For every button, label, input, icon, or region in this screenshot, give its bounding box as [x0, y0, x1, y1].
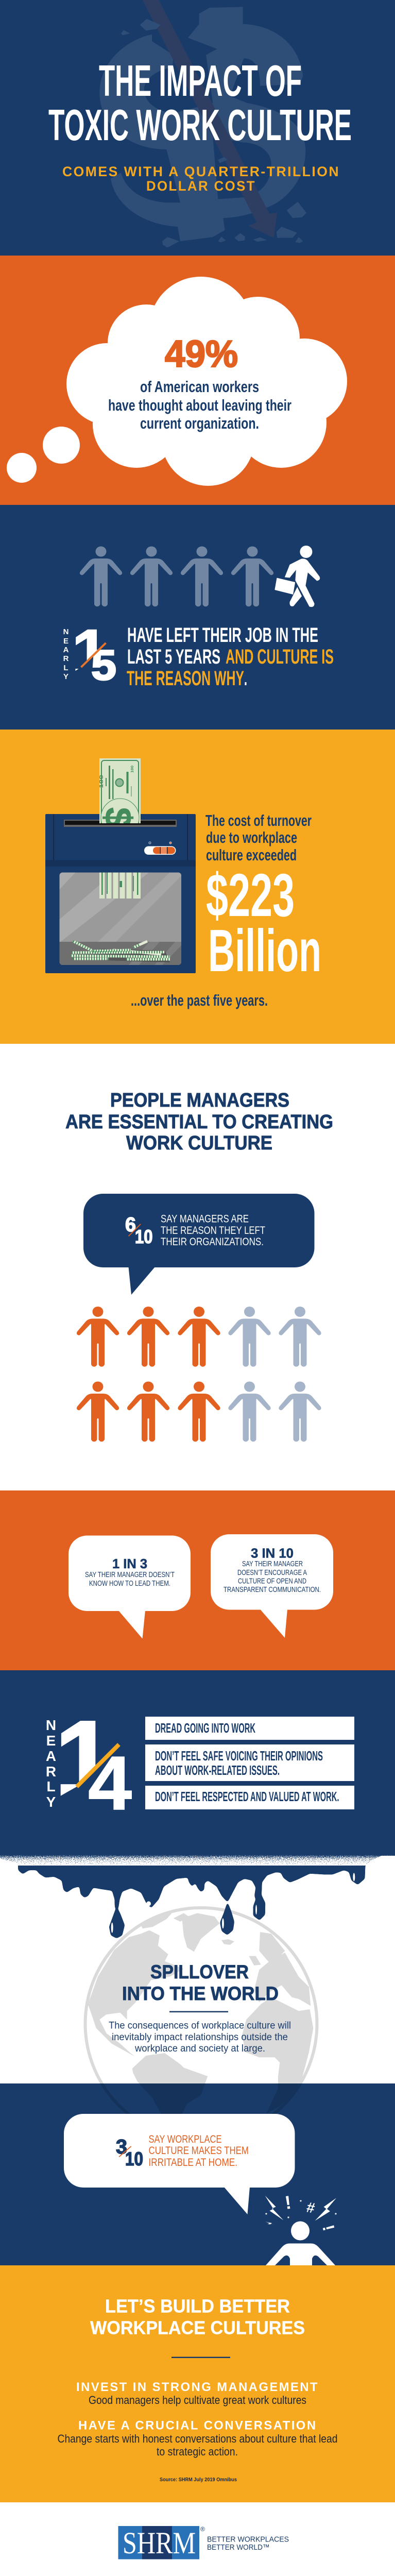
label: nearly vertical: NEARLY	[63, 628, 69, 681]
text: American workers: of American workers	[140, 378, 259, 396]
callout: 3 in 10: 3 IN 10	[251, 1546, 294, 1561]
subtitle: DOLLAR COST	[146, 178, 256, 194]
pictogram: six of ten people highlighted	[77, 1307, 321, 1442]
icon: irritated person: *	[265, 2212, 267, 2218]
callout: 3 in 10	[211, 1534, 333, 1638]
recommendation: have a crucial conversation	[58, 2418, 338, 2458]
icon: irritated person: *	[287, 2216, 289, 2222]
fraction: three tenths: 10	[125, 2148, 143, 2170]
fraction: one quarter	[61, 1721, 132, 1810]
shredded bill strips	[99, 872, 141, 899]
icon row: four standing people	[80, 546, 273, 606]
fraction: one fifth: 1	[72, 615, 109, 690]
callout text: THE REASON THEY LEFT	[161, 1225, 265, 1236]
icon: person walking away with briefcase	[275, 546, 320, 607]
footer: SHRM logo: BETTER WORKPLACES	[207, 2535, 289, 2544]
shredded money pile	[71, 941, 170, 962]
recommendation: have a crucial conversation: HAVE A CRUCIAL CONVERSATION	[78, 2418, 317, 2433]
callout: 3 in 10: SAY THEIR MANAGER	[242, 1560, 303, 1568]
panel: 49 percent thought cloud	[0, 256, 395, 505]
panel: nearly 1 in 5	[0, 505, 395, 730]
icon: thought cloud	[7, 277, 347, 486]
subtitle	[62, 164, 340, 194]
statistic: $223 Billion: Billion	[208, 917, 321, 984]
fraction: three tenths: 3	[116, 2136, 127, 2158]
icon: irritated person: !	[283, 2192, 293, 2213]
panel: people managers	[0, 1044, 395, 1490]
callout text: SAY MANAGERS ARE	[161, 1213, 249, 1225]
statistic: 49%: 49%	[165, 333, 238, 375]
callout: 3 in 10: DOESN’T ENCOURAGE A	[237, 1569, 307, 1577]
text: left their job: .	[244, 667, 247, 690]
panel: irritable at home	[0, 2083, 395, 2265]
body text: The consequences of workplace culture will	[109, 2020, 291, 2031]
list: workplace feelings	[145, 1717, 354, 1809]
body text: inevitably impact relationships outside the	[112, 2031, 288, 2043]
fraction: six tenths: 10	[135, 1226, 152, 1247]
icon: irritated person: !	[319, 2223, 338, 2233]
switch	[144, 842, 176, 855]
panel: build better workplace cultures	[0, 2265, 395, 2502]
panel: manager statistics	[0, 1490, 395, 1670]
icon: irritated person: *	[300, 2199, 302, 2205]
text: cost of turnover	[205, 811, 312, 864]
text: American workers: current organization.	[140, 414, 259, 432]
fraction: one quarter: 4	[88, 1741, 132, 1826]
background icon: cracked dollar sign with falling arrow	[99, 0, 306, 248]
heading: WORK CULTURE	[126, 1132, 272, 1154]
callout: 1 in 3	[68, 1535, 191, 1638]
callout text: THEIR ORGANIZATIONS.	[161, 1236, 264, 1248]
heading: WORKPLACE CULTURES	[90, 2317, 305, 2338]
callout: 1 in 3: SAY THEIR MANAGER DOESN’T	[85, 1571, 175, 1579]
recommendation: invest in strong management: Good managers help cultivate great work cultures	[89, 2394, 306, 2406]
statistic: $223 Billion	[206, 861, 321, 984]
heading	[122, 1961, 279, 2004]
illustration: globe	[83, 1906, 318, 2083]
callout: 1 in 3: KNOW HOW TO LEAD THEM.	[89, 1580, 170, 1588]
statistic: $223 Billion: $223	[206, 861, 295, 929]
fraction: one fifth: 5	[91, 641, 116, 689]
footer: SHRM logo: ®	[200, 2526, 205, 2533]
panel: nearly 1 in 4	[0, 1670, 395, 1938]
recommendation: invest in strong management	[76, 2380, 319, 2406]
footer: SHRM logo: BETTER WORLD™	[207, 2543, 270, 2552]
callout: 1 in 3: 1 IN 3	[112, 1556, 147, 1571]
text: cost of turnover: culture exceeded	[206, 846, 297, 864]
fraction: three tenths	[116, 2136, 143, 2170]
panel: hero	[0, 0, 395, 256]
text: left their job: THE REASON WHY	[127, 667, 244, 690]
text: left their job: AND CULTURE IS	[226, 646, 334, 668]
recommendation: invest in strong management: INVEST IN STRONG MANAGEMENT	[76, 2380, 319, 2394]
icon: dollar bill: 100	[99, 774, 105, 788]
icon: irritated person: #	[305, 2199, 316, 2216]
fraction: one quarter: 1	[55, 1698, 115, 1819]
footer: SHRM logo	[0, 2502, 395, 2576]
callout text	[161, 1213, 265, 1248]
illustration: dripping paint edge	[0, 1839, 395, 1938]
text: American workers	[108, 378, 291, 432]
recommendation: have a crucial conversation: Change starts with honest conversations about culture that lead	[58, 2432, 338, 2445]
title	[48, 57, 352, 150]
icon: dollar bill	[99, 758, 141, 823]
callout: 3 in 10: TRANSPARENT COMMUNICATION.	[224, 1586, 321, 1594]
icon: dollar bill: $	[97, 807, 139, 828]
panel: cost of turnover	[0, 730, 395, 1044]
heading: SPILLOVER	[150, 1961, 249, 1982]
text: left their job: LAST 5 YEARS	[127, 646, 220, 668]
list: workplace feelings: DREAD GOING INTO WORK	[155, 1720, 255, 1736]
heading: LET’S BUILD BETTER	[105, 2296, 290, 2316]
callout text	[148, 2133, 249, 2168]
illustration: globe lower part	[100, 2083, 302, 2114]
callout: 6 in 10 speech bubble	[83, 1194, 314, 1295]
heading	[65, 1090, 333, 1154]
text: over the past five years: ...over the past five years.	[131, 991, 268, 1009]
icon: paper shredder with dollar bill	[45, 758, 196, 973]
text: cost of turnover: due to workplace	[206, 828, 297, 846]
icon: irritated person	[265, 2192, 338, 2265]
recommendation: have a crucial conversation: to strategic action.	[157, 2445, 238, 2458]
callout text: CULTURE MAKES THEM	[148, 2145, 249, 2157]
text: cost of turnover: The cost of turnover	[205, 811, 312, 829]
fraction: six tenths: 6	[125, 1214, 136, 1236]
shredder window	[59, 872, 181, 965]
heading	[90, 2296, 305, 2338]
icon: irritated person: *	[335, 2212, 337, 2218]
text: left their job	[127, 624, 334, 690]
body text: workplace and society at large.	[134, 2043, 265, 2054]
heading: PEOPLE MANAGERS	[110, 1090, 289, 1111]
callout: 3 in 10 irritable	[64, 2114, 295, 2214]
fraction: six tenths	[125, 1214, 152, 1247]
fraction: one fifth	[75, 630, 116, 681]
heading: INTO THE WORLD	[122, 1983, 279, 2004]
subtitle: COMES WITH A QUARTER-TRILLION	[62, 164, 340, 179]
panel: spillover into the world	[83, 1906, 318, 2083]
label: nearly vertical: NEARLY	[46, 1717, 56, 1810]
callout: 3 in 10: CULTURE OF OPEN AND	[238, 1578, 306, 1586]
list: workplace feelings: ABOUT WORK-RELATED ISSUES.	[155, 1762, 280, 1778]
heading: ARE ESSENTIAL TO CREATING	[65, 1111, 333, 1133]
source note: Source: SHRM July 2019 Omnibus	[160, 2477, 237, 2483]
callout text: SAY WORKPLACE	[148, 2133, 221, 2145]
body text	[109, 2020, 291, 2054]
icon: dollar bill: 100	[131, 766, 134, 773]
text: American workers: have thought about leaving their	[108, 396, 291, 414]
footer: SHRM logo: SHRM	[123, 2526, 196, 2560]
callout text: IRRITABLE AT HOME.	[148, 2157, 237, 2168]
